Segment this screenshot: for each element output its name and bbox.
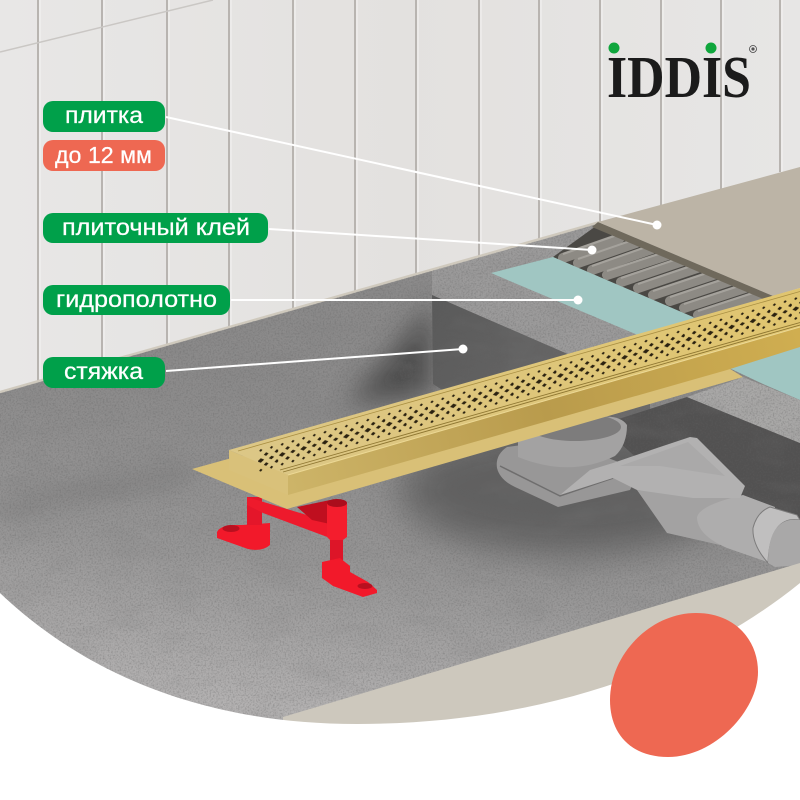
left foot: [217, 523, 270, 550]
pipe end: [768, 520, 800, 567]
right column: [327, 503, 347, 542]
upper ledge strip: [432, 223, 650, 355]
label: styazhka: стяжка: [64, 358, 143, 384]
drain trap: [497, 413, 800, 567]
gold linear drain: [192, 288, 800, 509]
tile edge: [592, 222, 773, 301]
label: gidropolotno: гидрополотно: [56, 286, 217, 312]
mid bracket: [297, 500, 330, 524]
concrete texture: [0, 220, 800, 740]
right screw: [330, 540, 343, 563]
leader lines: [166, 117, 662, 371]
right ledge: [687, 377, 800, 443]
step shadow: [14, 474, 166, 509]
concrete floor: [0, 222, 800, 740]
label: plitochny klei: [43, 213, 268, 243]
trap cylinder: [518, 417, 627, 467]
wall tiles: [0, 0, 800, 420]
trap base: [497, 440, 640, 507]
label: plitka: плитка: [65, 102, 143, 128]
bar: [247, 497, 330, 538]
floor shadow under drain: [400, 425, 740, 555]
left screw: [247, 497, 262, 525]
niche corner shadow: [345, 300, 432, 405]
outlet pipe: [697, 495, 775, 563]
line: styazhka: [166, 344, 468, 371]
white rounded mask: [0, 583, 800, 800]
bottom beige tile: [283, 563, 800, 740]
label: plitka: [43, 101, 165, 132]
floor tile beige: [598, 167, 800, 296]
line: gidropolotno: [231, 296, 582, 304]
right foot: [322, 558, 377, 597]
label: do 12 mm: [43, 140, 165, 171]
trap recess: [529, 413, 621, 441]
wall trim: [0, 222, 600, 392]
label: do 12 mm: до 12 мм: [55, 142, 152, 168]
right niche wall: [619, 397, 800, 519]
tile adhesive ridges: [553, 226, 770, 322]
coral blob: [610, 613, 758, 757]
logo: IDDIS: IDDIS: [607, 44, 751, 110]
pipe nut: [753, 507, 800, 563]
grate: [229, 288, 800, 475]
line: plitka: [166, 117, 662, 230]
drain flange: [192, 367, 743, 509]
label: gidropolotno: [43, 285, 230, 315]
drain end face: [229, 450, 288, 495]
label: plitochny klei: плиточный клей: [62, 214, 250, 240]
trap lower wedge: [637, 490, 743, 545]
waterproofing membrane: [491, 257, 800, 400]
line: klei: [269, 229, 596, 254]
trap upper band: [560, 437, 745, 498]
drain front face: [288, 327, 800, 495]
niche back wall: [432, 295, 650, 418]
red height-adjustable support: [217, 497, 377, 597]
grate perforation: [258, 288, 800, 483]
label: styazhka: [43, 357, 165, 388]
